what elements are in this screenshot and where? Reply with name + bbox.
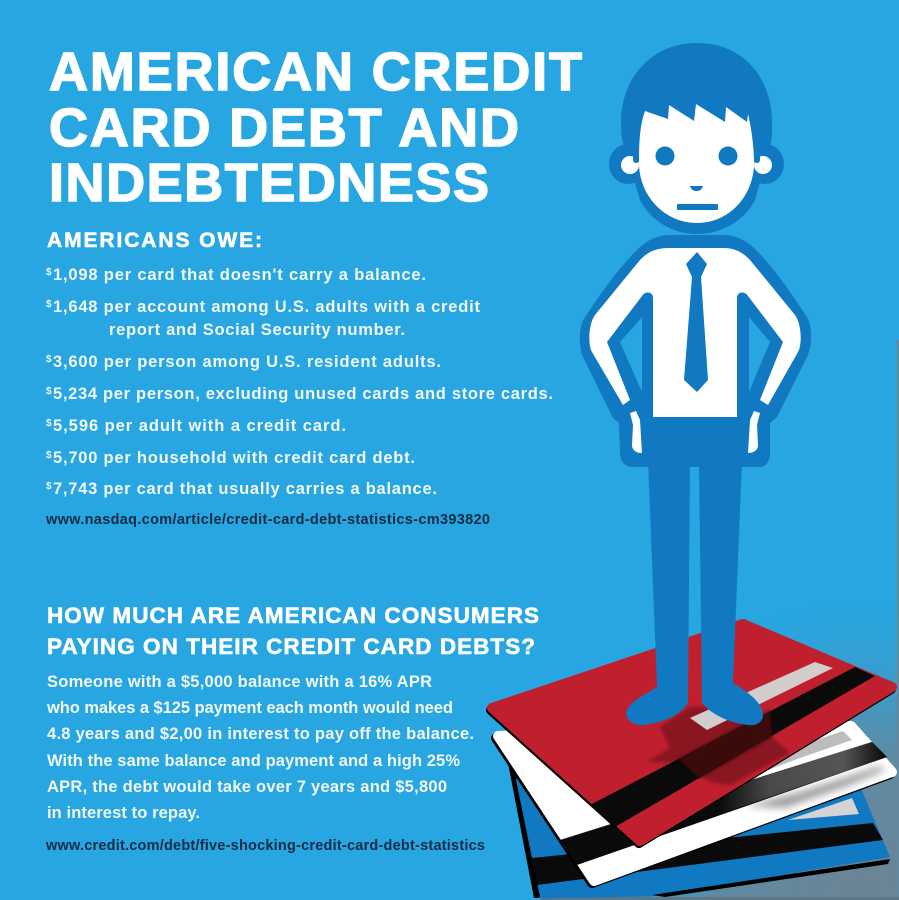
title: AMERICAN CREDIT [49, 42, 582, 102]
text block: amounts owed: $ [46, 354, 52, 365]
head outline and hair [609, 43, 784, 234]
heading: how much are consumers paying: HOW MUCH ARE AMERICAN CONSUMERS [47, 603, 539, 628]
text block: payment explanation: With the same balance and payment and a high 25% [47, 752, 460, 770]
source: credit.com: www.credit.com/debt/five-shocking-credit-card-debt-statistics [45, 838, 485, 854]
white card [496, 726, 892, 883]
text block: amounts owed: $ [46, 299, 52, 310]
text block: amounts owed: $ [46, 418, 52, 429]
blue card [508, 760, 890, 898]
text block: payment explanation: who makes a $125 payment each month would need [46, 699, 453, 717]
shirt [589, 248, 801, 417]
glare on stripe [720, 742, 887, 814]
credit card stack [491, 624, 892, 898]
eyes [656, 146, 738, 166]
text block: amounts owed: 1,648 per account among U.S. adults with a credit [53, 298, 480, 316]
title [49, 42, 582, 213]
heading: how much are consumers paying [47, 603, 539, 659]
text block: amounts owed: 1,098 per card that doesn't carry a balance. [53, 266, 426, 284]
heading: americans owe: AMERICANS OWE: [47, 229, 262, 252]
source: nasdaq: www.nasdaq.com/article/credit-card-debt-statistics-cm393820 [45, 512, 490, 528]
ears [621, 156, 772, 174]
legs and feet [626, 460, 763, 725]
sideburns [636, 135, 757, 160]
text block: amounts owed: $ [46, 481, 52, 492]
red card [491, 624, 892, 843]
text block: payment explanation: 4.8 years and $2,00 in interest to pay off the balance. [47, 725, 474, 743]
tie [684, 252, 708, 392]
text block: amounts owed: $ [46, 450, 52, 461]
text block: payment explanation: in interest to repay. [47, 804, 200, 822]
hands [630, 411, 760, 453]
man figure [580, 43, 811, 725]
title: CARD DEBT AND [49, 98, 519, 158]
text block: amounts owed: 5,596 per adult with a credit card. [53, 417, 346, 435]
nose [690, 186, 703, 191]
shadow on white card [745, 766, 885, 808]
text block: amounts owed: report and Social Security number. [109, 321, 405, 339]
body outline [580, 235, 811, 467]
mouth [677, 204, 718, 210]
text block: amounts owed: 3,600 per person among U.S. resident adults. [53, 353, 441, 371]
text block: amounts owed: 5,234 per person, excluding unused cards and store cards. [53, 385, 553, 403]
face [639, 104, 754, 223]
text block: amounts owed: $ [46, 267, 52, 278]
text block: payment explanation [46, 673, 474, 822]
gaps between arms and torso [620, 317, 770, 392]
text block: amounts owed: $ [46, 386, 52, 397]
text block: payment explanation: APR, the debt would take over 7 years and $5,800 [47, 778, 447, 796]
text block: amounts owed [46, 266, 553, 498]
title: INDEBTEDNESS [49, 153, 489, 213]
text block: amounts owed: 7,743 per card that usually carries a balance. [53, 480, 437, 498]
text block: amounts owed: 5,700 per household with credit card debt. [53, 449, 415, 467]
text block: payment explanation: Someone with a $5,000 balance with a 16% APR [47, 673, 432, 691]
heading: how much are consumers paying: PAYING ON THEIR CREDIT CARD DEBTS? [47, 634, 535, 659]
